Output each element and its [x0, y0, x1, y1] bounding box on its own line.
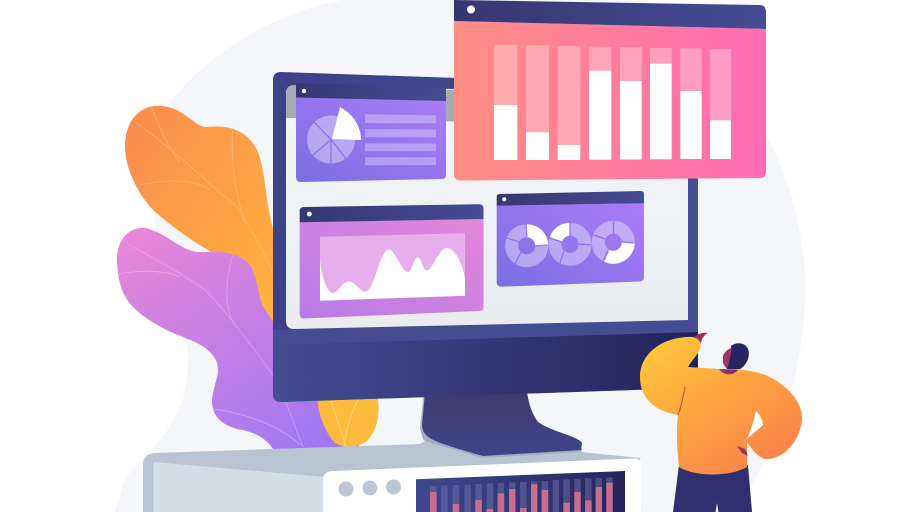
monitor [273, 72, 698, 402]
monitor chin [273, 320, 698, 402]
window: pie chart [296, 83, 446, 182]
desk front panel [323, 458, 642, 512]
bar values [494, 64, 731, 160]
armpit gap [747, 411, 763, 439]
list rows [365, 114, 436, 165]
window button [467, 6, 475, 14]
window: area chart [300, 204, 484, 318]
monitor screen [286, 85, 688, 329]
hand on hip [737, 446, 748, 456]
window header [497, 191, 644, 206]
donut 1 [507, 224, 548, 264]
background blob [115, 0, 805, 512]
window button [502, 197, 506, 201]
bar tracks [494, 45, 731, 146]
neck [719, 369, 738, 374]
window button [307, 212, 312, 216]
desk top surface [143, 441, 642, 512]
window button [302, 89, 306, 93]
display bar tracks [430, 478, 613, 512]
donut 2 [549, 222, 591, 263]
raised hand [694, 333, 708, 345]
window header [454, 0, 766, 29]
desk buttons [338, 480, 401, 496]
trousers [673, 465, 752, 512]
face [723, 348, 735, 370]
screen top bar [286, 85, 688, 126]
window: donut charts [497, 191, 644, 287]
window header [296, 83, 446, 101]
pie chart [307, 107, 361, 166]
monitor frame [273, 72, 698, 345]
display bar values [430, 483, 613, 512]
plant: orange leaf [125, 106, 276, 330]
hair [727, 343, 749, 370]
area chart [320, 248, 465, 301]
window: bar chart [454, 0, 766, 180]
person [640, 333, 802, 512]
donut 3 [594, 221, 635, 262]
desk side panel [154, 462, 325, 512]
window header [300, 204, 484, 222]
desk unit [143, 441, 642, 512]
plant: pink-purple leaf [117, 228, 360, 449]
plant: yellow leaf [317, 393, 379, 447]
sleeve crease [678, 387, 685, 415]
monitor stand [420, 392, 582, 458]
desk display [416, 471, 625, 512]
sweater [640, 337, 802, 474]
pie highlighted slice [332, 107, 361, 140]
chart background [320, 233, 465, 301]
